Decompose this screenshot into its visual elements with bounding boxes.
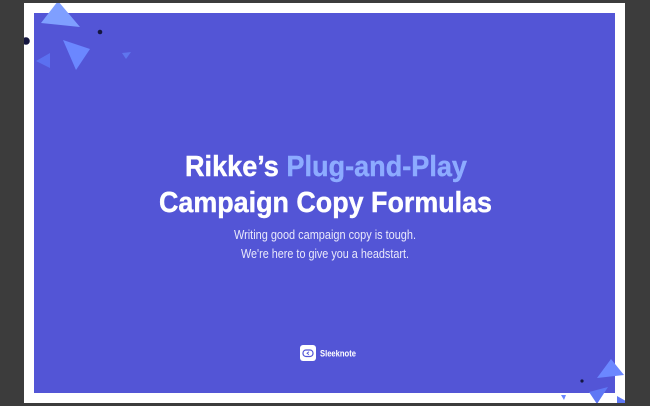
- title: [159, 151, 492, 219]
- title: Campaign Copy Formulas: [159, 187, 492, 219]
- subtitle: [234, 228, 416, 261]
- subtitle: Writing good campaign copy is tough.: [234, 228, 416, 242]
- title: Rikke’s Plug-and-Play: [185, 151, 467, 183]
- decorative shapes: top left: [22, 1, 131, 70]
- logo wordmark: Sleeknote: [320, 348, 356, 358]
- logo: Sleeknote: [300, 345, 356, 361]
- subtitle: We're here to give you a headstart.: [241, 247, 409, 261]
- icon: logo mark: [300, 345, 316, 361]
- decorative shapes: bottom right: [561, 359, 626, 404]
